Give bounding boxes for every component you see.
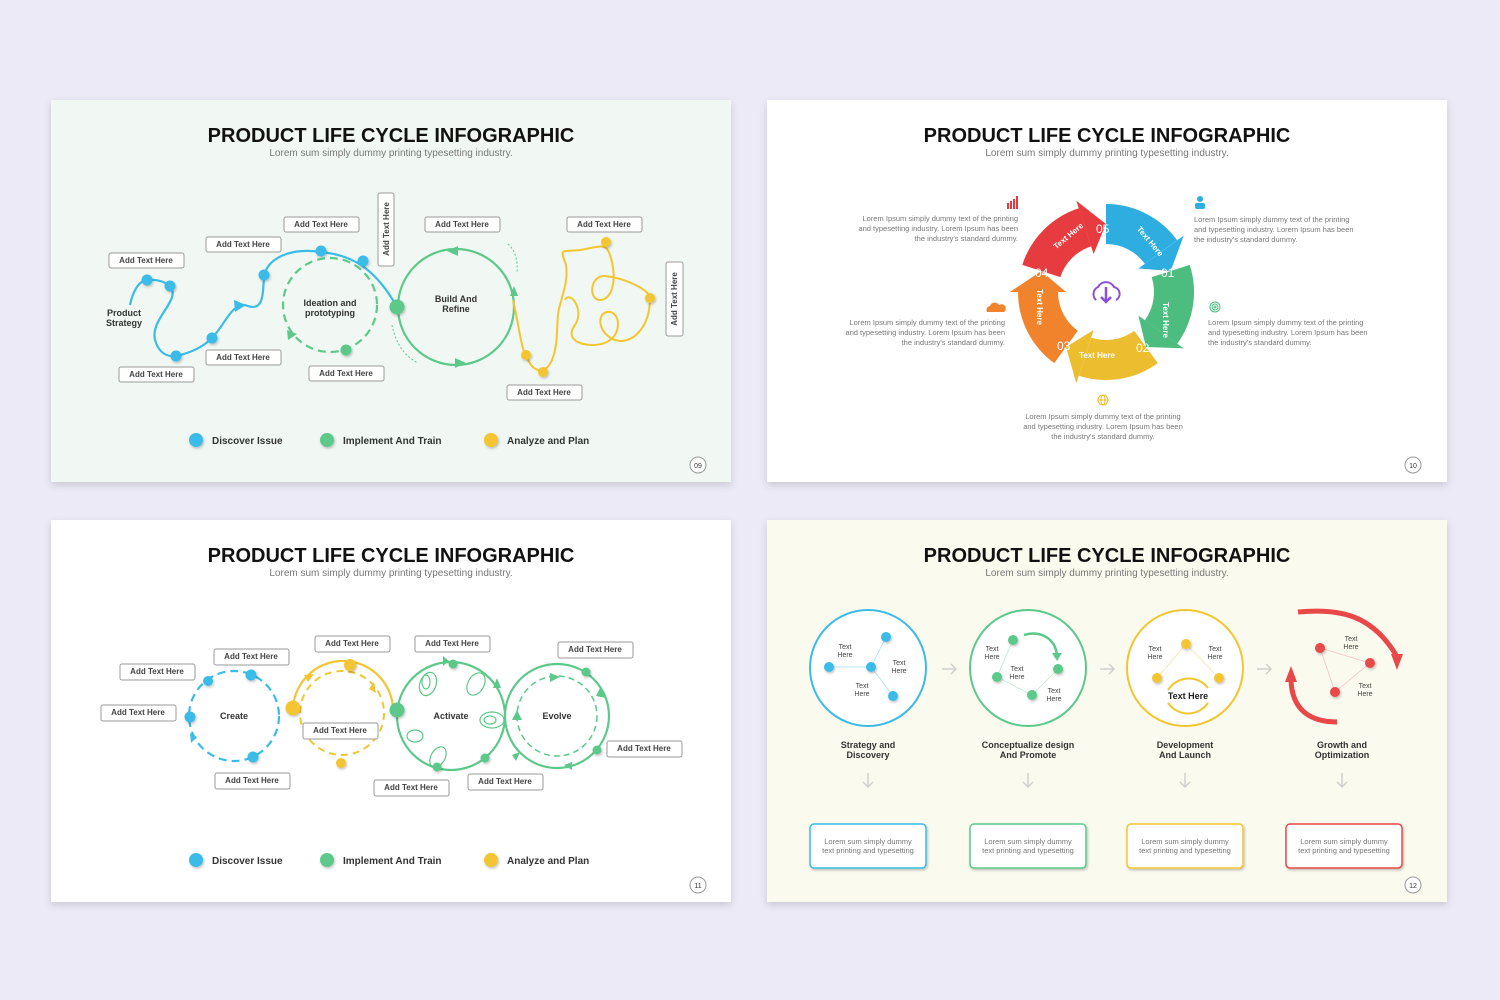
stage 2: conceptualize: Text xyxy=(1048,688,1060,695)
stage 4: growth: Here xyxy=(1343,644,1359,651)
stage 1: strategy: Here xyxy=(854,691,870,698)
text block: middle right xyxy=(1208,318,1368,347)
legend: Analyze and Plan xyxy=(507,856,589,867)
label boxes: Add Text Here xyxy=(319,369,373,378)
text block: middle right: the industry's standard dummy. xyxy=(1208,338,1311,347)
label boxes: Add Text Here xyxy=(382,202,391,256)
text block: middle left: the industry's standard dummy. xyxy=(902,338,1005,347)
page number: 11 xyxy=(694,883,702,890)
stage 2: conceptualize: Here xyxy=(1046,696,1062,703)
panel: slide 12 xyxy=(767,520,1447,902)
stage 2: conceptualize: Here xyxy=(984,654,1000,661)
text boxes: text printing and typesetting xyxy=(1298,846,1390,855)
page number xyxy=(690,877,706,893)
stage 2: conceptualize xyxy=(970,610,1086,760)
label boxes: Add Text Here xyxy=(478,777,532,786)
text block: middle right: Lorem Ipsum simply dummy text of the printing xyxy=(1208,318,1363,327)
text boxes: Lorem sum simply dummy xyxy=(1300,837,1388,846)
diagram: circles xyxy=(184,656,609,772)
label boxes: Add Text Here xyxy=(435,220,489,229)
stage 4: growth: Growth and xyxy=(1317,740,1367,750)
text boxes: text printing and typesetting xyxy=(982,846,1074,855)
label boxes: Add Text Here xyxy=(216,240,270,249)
diagram: journey path: prototyping xyxy=(305,308,355,318)
label boxes: Add Text Here xyxy=(425,639,479,648)
stage 3: development: Text xyxy=(1209,646,1221,653)
icon: cloud xyxy=(986,303,1006,312)
label boxes: Add Text Here xyxy=(325,639,379,648)
stage 1: strategy: Here xyxy=(891,668,907,675)
legend: Analyze and Plan xyxy=(507,436,589,447)
label boxes: Add Text Here xyxy=(517,388,571,397)
stage 3: development: Here xyxy=(1147,654,1163,661)
title: PRODUCT LIFE CYCLE INFOGRAPHIC xyxy=(208,125,574,147)
label boxes: Add Text Here xyxy=(130,667,184,676)
subtitle: Lorem sum simply dummy printing typesetting industry. xyxy=(985,568,1229,579)
stage 3: development: Text Here xyxy=(1168,691,1208,701)
cycle chart: Text Here xyxy=(1052,221,1085,251)
subtitle: Lorem sum simply dummy printing typesetting industry. xyxy=(269,148,513,159)
stage 2: conceptualize: And Promote xyxy=(1000,750,1056,760)
stage 3: development xyxy=(1127,610,1243,760)
stage 1: strategy xyxy=(810,610,926,760)
diagram: journey path xyxy=(106,237,655,377)
title: PRODUCT LIFE CYCLE INFOGRAPHIC xyxy=(208,545,574,567)
label boxes: Add Text Here xyxy=(384,783,438,792)
page number: 09 xyxy=(694,463,702,470)
stage 4: growth: Text xyxy=(1345,636,1357,643)
cycle chart xyxy=(1010,201,1184,383)
cycle chart: 02 xyxy=(1136,341,1150,355)
stage 2: conceptualize: Conceptualize design xyxy=(982,740,1074,750)
text block: middle left: and typesetting industry. Lorem Ipsum has been xyxy=(845,328,1005,337)
text block: top left xyxy=(858,214,1018,243)
label boxes: Add Text Here xyxy=(568,645,622,654)
stage 1: strategy: Text xyxy=(839,644,851,651)
stage 3: development: Text xyxy=(1149,646,1161,653)
cycle chart: Text Here xyxy=(1035,289,1044,325)
text boxes: text printing and typesetting xyxy=(822,846,914,855)
diagram: journey path: Product xyxy=(107,308,141,318)
page number xyxy=(1405,457,1421,473)
stage 2: conceptualize: Text xyxy=(986,646,998,653)
label boxes xyxy=(109,193,683,400)
stage 4: growth xyxy=(1285,611,1403,760)
page number xyxy=(690,457,706,473)
label boxes: Add Text Here xyxy=(224,652,278,661)
legend: Implement And Train xyxy=(343,856,442,867)
text boxes: Lorem sum simply dummy xyxy=(824,837,912,846)
text block: top right: the industry's standard dummy. xyxy=(1194,235,1297,244)
text block: top left: the industry's standard dummy. xyxy=(915,234,1018,243)
stage 2: conceptualize: Here xyxy=(1009,674,1025,681)
text block: bottom: Lorem Ipsum simply dummy text of the printing xyxy=(1025,412,1181,421)
diagram: journey path: Strategy xyxy=(106,318,142,328)
icon: fingerprint xyxy=(1210,302,1220,312)
text block: bottom: and typesetting industry. Lorem Ipsum has been xyxy=(1023,422,1183,431)
stage 1: strategy: Discovery xyxy=(846,750,890,760)
panel: slide 09 xyxy=(51,100,731,482)
diagram: circles: Activate xyxy=(433,711,469,721)
text block: top right: Lorem Ipsum simply dummy text of the printing xyxy=(1194,215,1349,224)
text block: middle right: and typesetting industry. Lorem Ipsum has been xyxy=(1208,328,1368,337)
stage 1: strategy: Here xyxy=(837,652,853,659)
panel: slide 11 xyxy=(51,520,731,902)
text boxes: Lorem sum simply dummy xyxy=(984,837,1072,846)
arrows between stages xyxy=(863,664,1347,787)
cycle chart: Text Here xyxy=(1161,302,1170,338)
cycle chart: 03 xyxy=(1057,339,1071,353)
text block: top left: Lorem Ipsum simply dummy text of the printing xyxy=(863,214,1018,223)
legend xyxy=(189,433,589,447)
label boxes: Add Text Here xyxy=(111,708,165,717)
diagram: circles: Create xyxy=(220,711,248,721)
label boxes xyxy=(101,636,682,796)
legend: Discover Issue xyxy=(212,856,283,867)
cycle chart: 04 xyxy=(1035,266,1049,280)
stage 1: strategy: Text xyxy=(856,683,868,690)
text boxes: text printing and typesetting xyxy=(1139,846,1231,855)
label boxes: Add Text Here xyxy=(670,272,679,326)
label boxes: Add Text Here xyxy=(129,370,183,379)
page number xyxy=(1405,877,1421,893)
icon: person xyxy=(1195,196,1205,209)
legend xyxy=(189,853,589,867)
cycle chart: 05 xyxy=(1096,222,1110,236)
subtitle: Lorem sum simply dummy printing typesetting industry. xyxy=(985,148,1229,159)
stage 4: growth: Optimization xyxy=(1315,750,1369,760)
cycle chart: 01 xyxy=(1161,266,1175,280)
stage 3: development: And Launch xyxy=(1159,750,1211,760)
stage 4: growth: Text xyxy=(1359,683,1371,690)
diagram: journey path: Build And xyxy=(435,294,477,304)
diagram: circles: Evolve xyxy=(542,711,572,721)
label boxes: Add Text Here xyxy=(216,353,270,362)
title: PRODUCT LIFE CYCLE INFOGRAPHIC xyxy=(924,545,1290,567)
label boxes: Add Text Here xyxy=(617,744,671,753)
cycle chart: Text Here xyxy=(1135,225,1165,258)
text block: top right xyxy=(1194,215,1354,244)
label boxes: Add Text Here xyxy=(313,726,367,735)
stage 1: strategy: Text xyxy=(893,660,905,667)
text block: bottom: the industry's standard dummy. xyxy=(1051,432,1155,441)
stage 1: strategy: Strategy and xyxy=(841,740,895,750)
label boxes: Add Text Here xyxy=(225,776,279,785)
stage 3: development: Development xyxy=(1157,740,1213,750)
text boxes xyxy=(810,824,1402,868)
text block: middle left xyxy=(845,318,1005,347)
title: PRODUCT LIFE CYCLE INFOGRAPHIC xyxy=(924,125,1290,147)
label boxes: Add Text Here xyxy=(119,256,173,265)
legend: Discover Issue xyxy=(212,436,283,447)
icon: bar chart xyxy=(1007,196,1018,209)
page number: 12 xyxy=(1409,883,1417,890)
legend: Implement And Train xyxy=(343,436,442,447)
stage 3: development: Here xyxy=(1207,654,1223,661)
text block: top left: and typesetting industry. Lorem Ipsum has been xyxy=(858,224,1018,233)
text block: middle left: Lorem Ipsum simply dummy text of the printing xyxy=(850,318,1005,327)
icon: cloud download xyxy=(1094,282,1120,302)
panel: slide 10 xyxy=(767,100,1447,482)
stage 4: growth: Here xyxy=(1357,691,1373,698)
subtitle: Lorem sum simply dummy printing typesetting industry. xyxy=(269,568,513,579)
label boxes: Add Text Here xyxy=(577,220,631,229)
diagram: journey path: Ideation and xyxy=(303,298,357,308)
text block: top right: and typesetting industry. Lorem Ipsum has been xyxy=(1194,225,1354,234)
stage 2: conceptualize: Text xyxy=(1011,666,1023,673)
text block: bottom xyxy=(1023,412,1183,441)
cycle chart: Text Here xyxy=(1079,351,1115,360)
text boxes: Lorem sum simply dummy xyxy=(1141,837,1229,846)
diagram: journey path: Refine xyxy=(442,304,470,314)
label boxes: Add Text Here xyxy=(294,220,348,229)
icon: globe xyxy=(1098,395,1108,405)
page number: 10 xyxy=(1409,463,1417,470)
